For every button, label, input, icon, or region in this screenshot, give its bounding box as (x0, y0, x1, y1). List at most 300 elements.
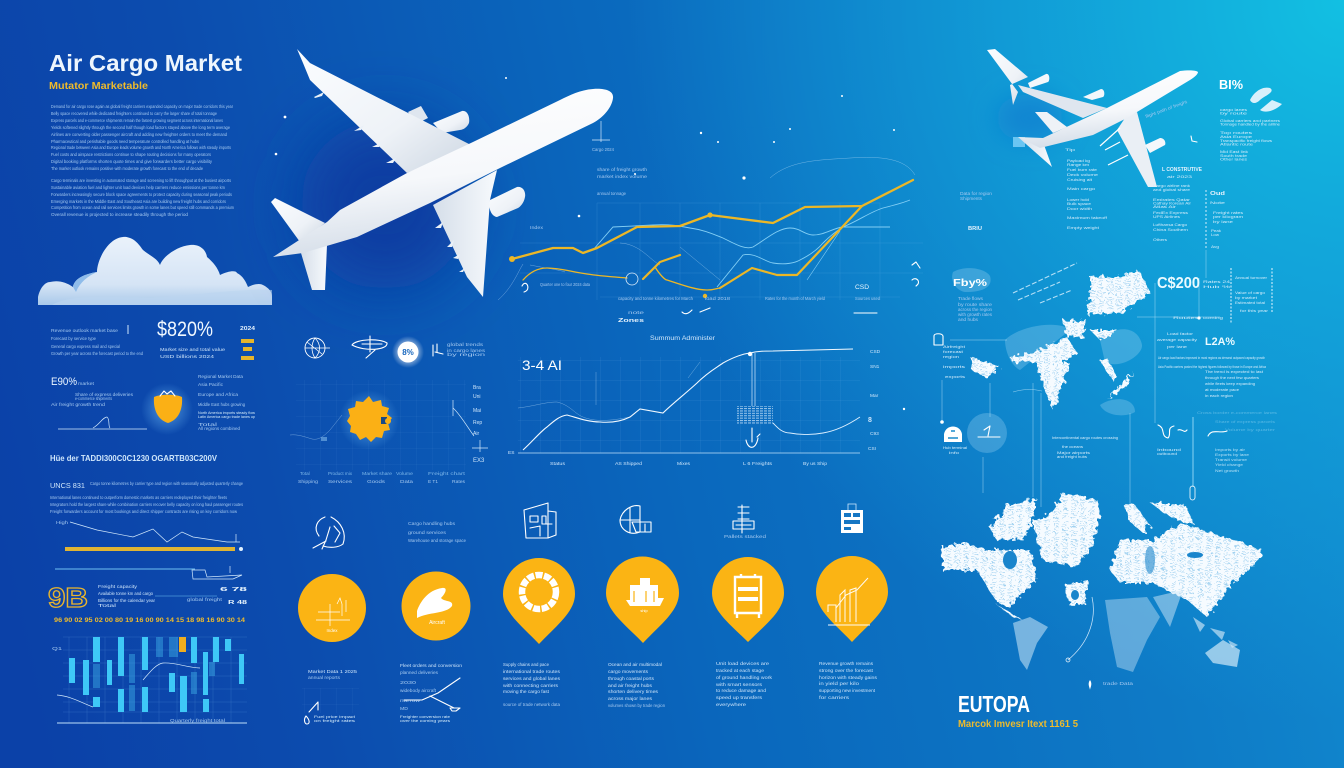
thin light blue series (593, 200, 910, 287)
stat row: E90% with shield: Middle East hubs growing (198, 402, 246, 407)
stat row: $820%: USD billions 2024 (160, 354, 214, 360)
engine upper (408, 106, 469, 133)
column 1 caption: Fuel price impact (314, 715, 355, 719)
right axis values: Mai (473, 408, 481, 414)
gold figure block: Freight capacity (98, 584, 138, 590)
axis labels: CSD (870, 349, 881, 355)
section text (50, 481, 244, 514)
L2A% stat block: at moderate pace (1205, 388, 1239, 392)
column 6 caption: in yield per kilo (819, 681, 859, 687)
chart labels: Index (530, 225, 544, 230)
L2A% stat block: Asia Pacific carriers posted the highest figures followed by those in Europe and Africa (1158, 365, 1267, 369)
flap fairings (314, 92, 465, 272)
stat row: E90% with shield: market (78, 381, 95, 386)
right axis values: Rep (473, 420, 482, 426)
intro text block: Pharmaceutical and perishable goods need temperature controlled handling at hubs (51, 139, 200, 144)
L2A% stat block: per lane (1167, 345, 1187, 349)
lower labels: Shipping (298, 479, 318, 484)
connector lines (942, 250, 1220, 507)
axis labels: C93 (870, 431, 879, 437)
small white airplane (987, 49, 1198, 187)
column 2 caption: Freighter conversion rate (400, 715, 450, 719)
faint curves (498, 157, 915, 300)
upper world map: region (943, 355, 959, 359)
column 2 caption: planned deliveries (400, 670, 439, 675)
annotation column left: Lower hold (1067, 198, 1089, 202)
right axis values (473, 385, 485, 464)
stat row: E90% with shield: Air freight growth trend (51, 402, 106, 407)
gold series lower (523, 267, 720, 290)
top right annotations: BI% (1219, 77, 1243, 92)
gold figure block: 6 78 (220, 587, 248, 593)
intro text block: Overall revenue is projected to increase steadily through the period (51, 212, 189, 217)
bar chart: Quarterly freight total (170, 718, 225, 723)
axis labels: 8 (868, 417, 872, 424)
dim bars (93, 637, 215, 711)
column 3 caption: Supply chains and pace (503, 662, 549, 668)
marker 6: pin with growth chart (816, 556, 888, 642)
axis labels: AS Shipped (615, 461, 642, 467)
column 6 caption: supporting new investment (819, 688, 876, 694)
icon: cargo unit (841, 504, 863, 533)
column 1 caption: on freight rates (314, 719, 355, 723)
yellow progress bar (65, 547, 235, 551)
stat row: E90% with shield: Europe and Africa (198, 392, 239, 397)
intro text block: Airlines are converting older passenger aircraft and adding new freighter orders to meet the demand (51, 132, 227, 137)
lower labels: Goods (367, 479, 386, 484)
lower labels: Market share (362, 471, 392, 476)
section text: UNCS 831 (50, 481, 85, 490)
fuselage (273, 89, 613, 257)
stat row: E90% with shield: Total (198, 422, 217, 427)
chart labels: Rates for the month of March yield (765, 296, 825, 301)
upper world map: by route share (958, 302, 993, 307)
column 5 caption: with smart sensors (716, 682, 763, 688)
stat row: $820%: Market size and total value (160, 347, 225, 353)
stat row: $820%: Revenue outlook market base (51, 328, 119, 333)
annotation column middle: Emirates Qatar (1153, 198, 1191, 202)
stat row: E90% with shield (51, 374, 255, 435)
bar chart: Q1 (52, 646, 63, 651)
annotation column middle: Lufthansa Cargo (1153, 223, 1187, 227)
section text: Freight forwarders account for most bookings and direct shipper contracts are rising on key corridors now (50, 509, 238, 514)
regional notes with capsule (1157, 410, 1277, 500)
C$200 stat block: Routes (1173, 316, 1199, 320)
stat row: E90% with shield: All regions combined (198, 426, 241, 431)
lower labels: E T1 (428, 479, 438, 484)
map centre note: and freight hubs (1057, 455, 1087, 459)
annotation column middle: UPS Airlines (1153, 215, 1180, 219)
L2A% stat block: through the next few quarters (1205, 376, 1259, 380)
stat row: $820%: General cargo express mail and special (51, 344, 120, 349)
upper world map: imports (943, 365, 965, 369)
column 4 caption (608, 662, 666, 708)
upper world map: across the region (958, 307, 993, 312)
upper world map (934, 263, 1150, 424)
stat row: E90% with shield: e-commerce shipments (75, 396, 113, 401)
regional notes with capsule: Volume by quarter (1225, 427, 1276, 432)
stat row: E90% with shield: Asia Pacific (198, 382, 224, 387)
right axis values: Air (473, 431, 479, 437)
icon label (433, 342, 486, 357)
marker 4: pin with cargo ship (606, 556, 679, 643)
plane shadow (300, 120, 470, 290)
top right annotations: cargo lanes (1220, 108, 1247, 112)
annotation column left: Tip (1065, 148, 1075, 152)
tail stabilisers (271, 198, 325, 242)
marker 5: pin with trolley (712, 557, 784, 642)
chart labels: CSD (855, 285, 870, 291)
intro text block: Regional trade between Asia and Europe leads volume growth and North America follows with steady imports (51, 145, 232, 150)
top right annotations: air 2023 (1167, 175, 1192, 179)
region title: EUTOPA (958, 691, 1030, 717)
chart labels: annual tonnage (597, 191, 627, 196)
column 6 caption (819, 661, 878, 701)
chart labels: share of freight growth (597, 167, 648, 172)
column 5 caption: speed up transfers (716, 695, 763, 701)
axis labels: SN1 (870, 364, 880, 370)
column 5 caption: tracked at each stage (716, 668, 764, 674)
regional notes with capsule: Cross border e-commerce lanes (1197, 410, 1277, 415)
top right annotations: by route (1220, 112, 1247, 116)
gold figure block: Available tonne km and cargo (98, 591, 153, 597)
chart labels: Sources used (855, 296, 881, 301)
column 3 caption: services and global lanes (503, 676, 561, 682)
top right annotations: Global carriers and partners (1220, 119, 1280, 123)
L2A% stat block: The trend is expected to last (1205, 370, 1263, 374)
column 5 caption: Unit load devices are (716, 661, 769, 667)
upper world map: Airfreight (943, 345, 965, 349)
column 2 caption: narrow (400, 698, 421, 703)
annotation column middle: Others (1153, 238, 1167, 242)
top right annotations: Mid East link (1220, 150, 1248, 154)
lower area chart: 3-4 AI (522, 357, 562, 373)
icons row above pins: Pallets stacked (724, 534, 767, 539)
column 6 caption: for carriers (819, 695, 850, 701)
top right annotations: Tonnage handled by the airline (1220, 122, 1280, 126)
intro text block: Digital booking platforms shorten quote times and give forwarders better cargo visibility (51, 159, 213, 164)
annotation column left: Door width (1067, 207, 1092, 211)
column 2 caption: Fleet orders and conversion (400, 663, 462, 669)
annotation column left: BRIU (968, 226, 982, 232)
intro text block: Yields softened slightly through the second half though load factors stayed above the long term average (51, 125, 230, 130)
L2A% stat block: average capacity (1157, 338, 1197, 342)
cloud illustration (38, 237, 272, 305)
right axis values: Uni (473, 394, 481, 400)
top right annotations: Top routes (1220, 131, 1252, 135)
chart labels: load 2018 (705, 296, 731, 301)
C$200 stat block: Annual turnover (1235, 276, 1268, 280)
lower labels: Total (300, 471, 310, 476)
column 4 caption: and air freight hubs (608, 683, 653, 689)
engine lower (489, 187, 525, 217)
annotation column middle: Cathay Korean Air (1153, 202, 1192, 206)
axis labels: CSI (868, 446, 876, 452)
column 4 caption: volumes shown by trade region (608, 703, 666, 708)
upper world map: exports (945, 375, 965, 379)
column 4 caption: Ocean and air multimodal (608, 662, 662, 668)
annotation column right: by lane (1213, 220, 1233, 224)
chart gridlines (520, 203, 923, 300)
large white airplane (271, 49, 613, 297)
intro text block: Competition from ocean and rail services limits growth in some lanes but speed still commands a premium (51, 205, 234, 210)
annotation column middle (1153, 184, 1192, 242)
intro text block: Sustainable aviation fuel and lighter unit load devices help carriers reduce emissions per tonne km (51, 185, 225, 190)
lower labels: Volume (396, 471, 413, 476)
column 1 caption: Market Data 1 2025 (308, 669, 357, 675)
right axis values: EX3 (473, 458, 485, 464)
map centre note (1052, 436, 1118, 459)
icons row above pins (313, 503, 863, 549)
map centre note: the oceans (1062, 445, 1083, 449)
regional notes with capsule: outbound (1157, 452, 1177, 456)
annotation column middle: China Southern (1153, 228, 1188, 232)
mini yellow legend: 2024 (240, 326, 255, 332)
bar chart (52, 637, 247, 723)
intro text block: Cargo terminals are investing in automated storage and screening to lift throughput at the busiest airports (51, 178, 232, 183)
annotation column right: Oud (1210, 191, 1225, 197)
section text: Cargo tonne kilometres by carrier type and region with seasonally adjusted quarterly change (90, 481, 243, 486)
top right annotations (1145, 77, 1282, 179)
gold figure block: R 48 (228, 600, 247, 606)
lower labels: Rates (452, 479, 466, 484)
icon label: global trends (447, 342, 484, 347)
map legend (1089, 680, 1134, 690)
right axis values: Bra (473, 385, 481, 391)
column 6 caption: Revenue growth remains (819, 661, 874, 667)
top right annotations: Atlantic route (1220, 142, 1253, 146)
annotation column left: Main cargo (1067, 187, 1095, 191)
annotation column left: Cruising alt (1067, 178, 1092, 182)
small plane shadow (996, 94, 1064, 142)
small line chart with yellow bar: High (56, 520, 69, 525)
icon: route tool (352, 336, 387, 358)
annotation column right (1206, 190, 1243, 250)
lower labels: Data (400, 479, 414, 484)
intro text block: Express parcels and e-commerce shipments remain the fastest growing segment across international lanes (51, 118, 224, 123)
axis labels: By us Ship (803, 461, 827, 467)
column 3 caption: with connecting carriers (503, 683, 559, 689)
upper world map: with growth rates (958, 312, 993, 317)
regional notes with capsule: Exports by lane (1215, 452, 1249, 457)
C$200 stat block: Value of cargo (1235, 291, 1265, 295)
translucent map patches (952, 268, 1142, 415)
icon: globe and box (620, 506, 651, 533)
section heading: Hüe der TADDI300C0C1230 OGARTB03C200V (50, 454, 218, 463)
stat row: $820%: Growth per year across the forecast period to the end (51, 351, 143, 356)
regional notes with capsule: Yield change (1215, 462, 1243, 467)
hatched data block (737, 406, 773, 424)
map centre note: Intercontinental cargo routes crossing (1052, 436, 1118, 440)
annotation column right: Note (1210, 201, 1225, 205)
lower labels: Product mix (328, 471, 353, 476)
C$200 stat block: Estimated total (1235, 301, 1265, 305)
big figure: $820% (157, 318, 213, 341)
water cut-outs (1003, 546, 1203, 600)
chart labels (522, 121, 920, 324)
column 3 caption: source of trade network data (503, 702, 561, 707)
top right annotations: Transpacific freight flows (1220, 139, 1272, 143)
icon: logistics worker sketch (313, 517, 344, 549)
regional notes with capsule: Net growth (1215, 468, 1239, 473)
translucent continents (1013, 590, 1240, 672)
icon: globe (305, 338, 330, 358)
column 3 caption (503, 662, 561, 707)
L2A% stat block: Load factor (1167, 332, 1194, 336)
upper wing (297, 49, 473, 173)
top right annotations: South trade (1220, 154, 1247, 158)
C$200 stat block: coming (1203, 316, 1223, 320)
chart labels: Quarter one to four 2024 data (540, 282, 590, 287)
top right annotations: L CONSTRUTIVE (1162, 167, 1203, 173)
intro text block: Belly space recovered while dedicated freighters continued to carry the larger share of total tonnage (51, 111, 217, 116)
icon: white badge: 8% (402, 348, 414, 357)
annotation column left: Payload kg (1067, 159, 1090, 163)
annotation column right: Peak (1211, 229, 1221, 233)
gold figure block: global freight (187, 597, 223, 602)
mini yellow legend (240, 326, 255, 360)
column 5 caption: of ground handling work (716, 675, 773, 681)
intro text block: Emerging markets in the Middle East and Southeast Asia are building new freight hubs and corridors (51, 199, 227, 204)
column 2 caption: 2030 (400, 680, 417, 685)
icon: pallet stack (733, 505, 754, 533)
intro text block (51, 104, 234, 217)
column 6 caption: strong over the forecast (819, 668, 874, 674)
top right annotations: flight path of freight (1145, 99, 1189, 119)
region subtitle: Marcok Imvesr Itext 1161 5 (958, 719, 1078, 730)
top right annotations: Asia Europe (1220, 135, 1252, 139)
C$200 stat block (1157, 268, 1272, 323)
marker 2: circle with plane shape (402, 572, 470, 640)
gold figure block: Billions for the calendar year (98, 598, 155, 604)
column 1 caption (302, 669, 359, 724)
annotation column left: Bulk space (1067, 202, 1091, 206)
list text (408, 521, 467, 543)
annotation column right: Avg (1211, 245, 1219, 249)
hub icon with label: info (949, 451, 959, 455)
gold figure block: 9B (48, 582, 88, 613)
gold figure block: Total (98, 603, 116, 609)
marker 1: circle with chart: Index (326, 628, 338, 633)
column 2 caption: widebody aircraft (400, 688, 437, 693)
column 3 caption: moving the cargo fast (503, 689, 550, 695)
gold axis numbers: 96 90 02 95 02 00 80 19 16 00 90 14 15 18 98 16 90 30 14 (54, 618, 246, 624)
annotation column left: Shipments (960, 196, 983, 201)
annotation column left: Data for region (960, 191, 993, 196)
regional notes with capsule: Share of express parcels (1215, 419, 1275, 424)
L2A% stat block: L2A% (1205, 336, 1235, 348)
top right annotations: Other lanes (1220, 158, 1247, 162)
column 2 caption (400, 663, 462, 723)
column 6 caption: horizon with steady gains (819, 675, 878, 681)
intro text block: Fuel costs and airspace restrictions continue to shape routing decisions for many operators (51, 152, 212, 157)
marker 1: circle with chart (298, 574, 366, 642)
C$200 stat block: C$200 (1157, 275, 1200, 292)
gold figure block (48, 582, 248, 613)
column 2 caption: over the coming years (400, 719, 450, 723)
annotation column left: Maximum takeoff (1067, 216, 1108, 220)
gold series main (512, 180, 913, 259)
annotation column right: Low (1211, 233, 1219, 237)
marker 4: pin with cargo ship: ship (640, 608, 648, 613)
stat row: $820% (51, 318, 255, 360)
L2A% stat block: Air cargo load factors improved in most regions as demand outpaced capacity growth (1158, 356, 1265, 360)
annotation column middle: Cargo airline rank (1153, 184, 1190, 188)
chart labels: capacity and tonne kilometres for March (618, 296, 694, 301)
axis labels: Status (550, 461, 566, 467)
marker 3: pin with ring (503, 558, 575, 644)
regional notes with capsule: Transit volume (1215, 457, 1247, 462)
stat row: E90% with shield: E90% (51, 376, 77, 388)
bright bars (69, 637, 244, 712)
list text: ground services (408, 530, 447, 535)
chart labels: Cargo 2024 (592, 147, 615, 152)
annotation column middle: Atlas Air (1153, 205, 1177, 209)
lower world map (942, 493, 1263, 690)
small line chart with yellow bar (55, 520, 243, 579)
lower labels (298, 471, 466, 484)
stat row: E90% with shield: Regional Market Data (198, 374, 244, 379)
column 4 caption: across major lanes (608, 696, 653, 702)
lower wing (433, 170, 497, 297)
upper world map: Trade flows (958, 296, 984, 301)
lower labels: Services (328, 479, 353, 484)
annotation column right: Freight rates (1213, 211, 1243, 215)
C$200 stat block: by market (1235, 296, 1257, 300)
column 4 caption: shorten delivery times (608, 689, 659, 695)
list text: Warehouse and storage space (408, 538, 467, 543)
C$200 stat block: Hub % (1203, 285, 1232, 289)
column 1 caption: annual reports (308, 675, 341, 680)
sun icon (339, 390, 399, 450)
sun chart panel (290, 380, 488, 484)
annotation column right: per kilogram (1213, 215, 1243, 219)
solid land masses (942, 493, 1263, 620)
regional notes with capsule: Inbound (1157, 448, 1181, 452)
axis labels: Mixes (677, 461, 691, 467)
axis labels: L 6 Freights (743, 461, 773, 467)
intro text block: Forwarders increasingly secure block space agreements to protect capacity during seasonal peak periods (51, 192, 233, 197)
axis labels: Mar (870, 393, 879, 399)
marker 2: circle with plane shape: Aircraft (429, 620, 446, 626)
icon label: in cargo lanes (447, 348, 486, 353)
icon label: by region (447, 352, 486, 357)
annotation column left: Fuel burn rate (1067, 168, 1097, 172)
column 2 caption: MD (400, 706, 408, 711)
lower chart heading: Summum Administer (650, 335, 715, 342)
lower area chart (508, 349, 881, 467)
section text: Integrators hold the largest share while combination carriers recover belly capacity on long haul passenger routes (50, 502, 244, 507)
icon: white badge (392, 336, 424, 368)
land masses (970, 272, 1150, 410)
map legend: trade Data (1103, 681, 1134, 686)
regional notes with capsule: Imports by air (1215, 447, 1246, 452)
axis labels: ES (508, 450, 514, 456)
annotation column middle: and global share (1153, 188, 1190, 192)
annotation column left: Range km (1067, 163, 1089, 167)
intro text block: The market outlook remains positive with moderate growth forecast to the end of decade (51, 166, 203, 171)
stat row: E90% with shield: North America imports steady flow (198, 411, 255, 415)
column 4 caption: cargo movements (608, 669, 649, 675)
chart labels: Zones (618, 318, 644, 324)
annotation column left: Empty weight (1067, 226, 1099, 230)
column 5 caption: everywhere (716, 702, 746, 708)
column 5 caption (716, 661, 773, 708)
upper world map: and hubs (958, 317, 979, 322)
hub icon with label: Hub terminal (943, 446, 967, 450)
list text: Cargo handling hubs (408, 521, 456, 526)
annotation column left: Deck volume (1067, 173, 1098, 177)
